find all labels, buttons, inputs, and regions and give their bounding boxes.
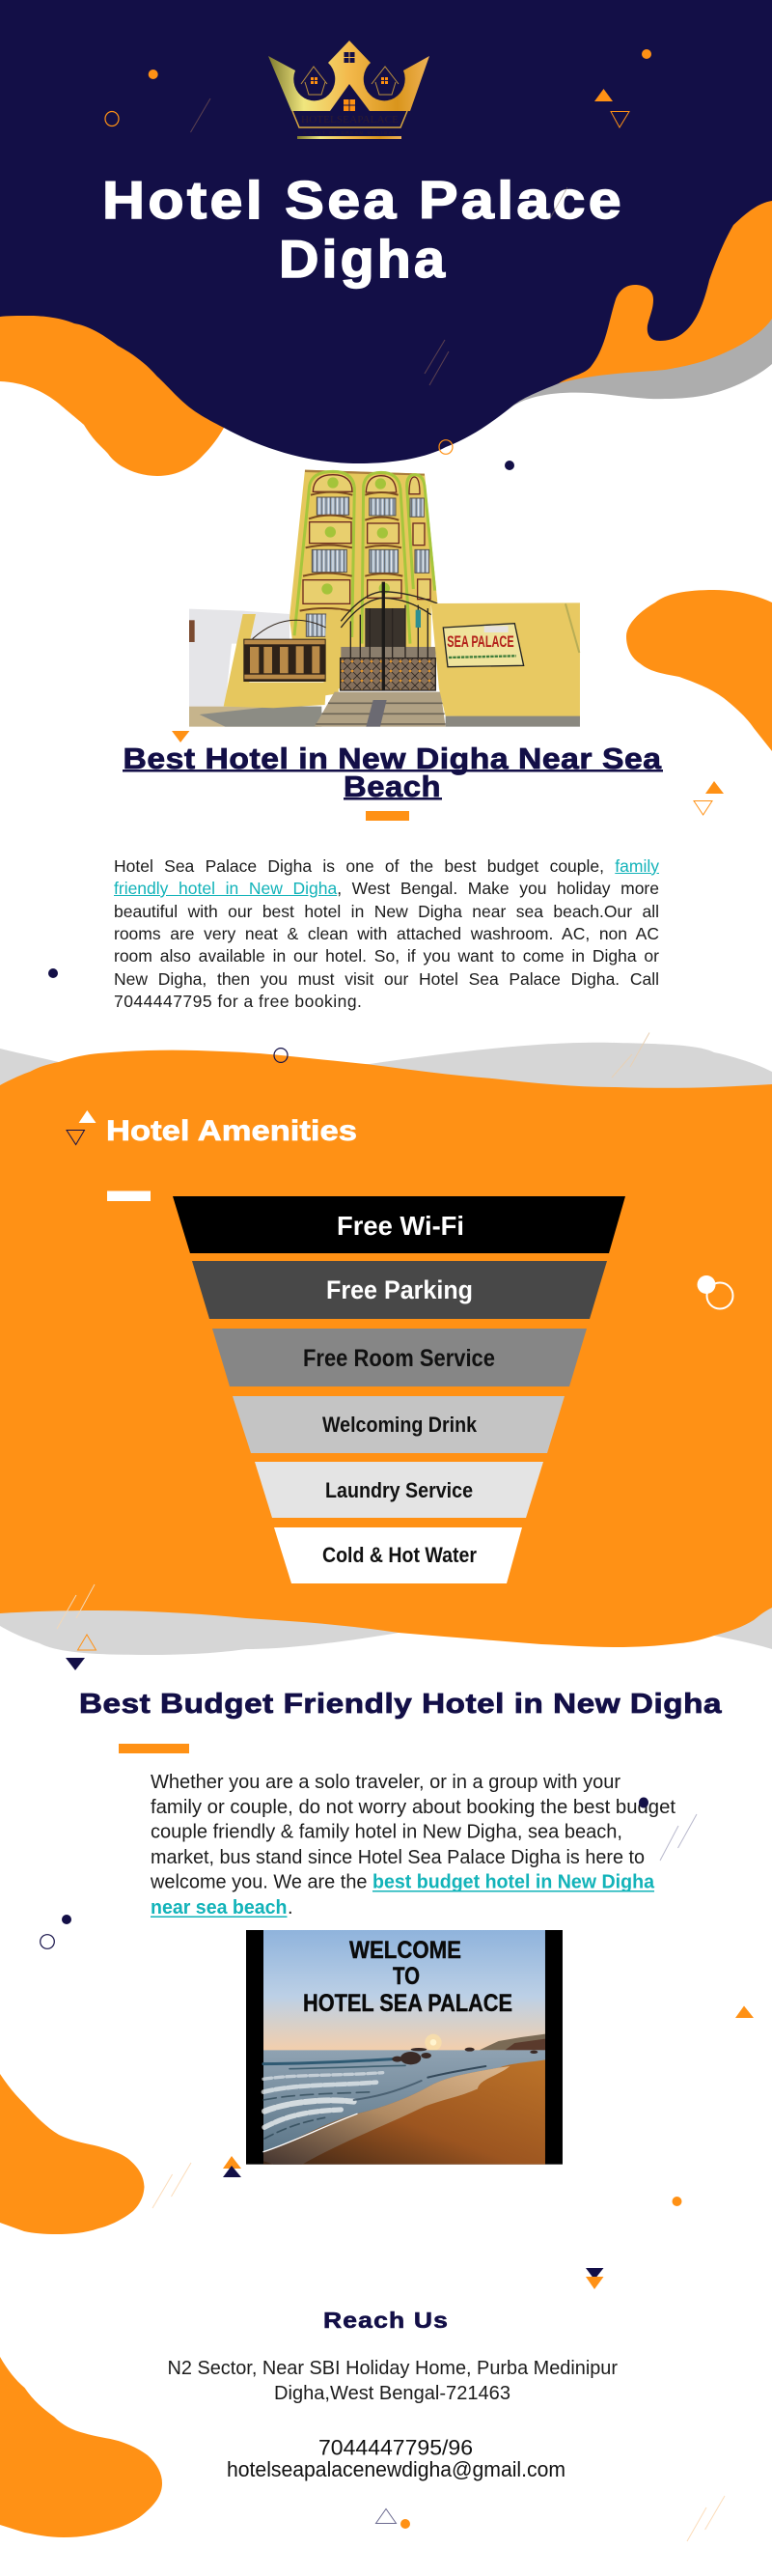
left fence (243, 639, 326, 682)
heading: reach us: Reach Us (323, 2308, 449, 2333)
entrance steps (315, 692, 446, 727)
contact: address (168, 2358, 618, 2404)
footer decorations (223, 2156, 681, 2529)
ground (189, 707, 317, 727)
photo: hotel building (189, 470, 580, 727)
heading: hotel amenities: Hotel Amenities (106, 1115, 357, 1147)
right orange blob (626, 590, 772, 751)
contact: phone and email: hotelseapalacenewdigha@gmail.com (227, 2457, 565, 2481)
centre window (344, 99, 355, 111)
right small house (372, 67, 399, 95)
headland (480, 2034, 545, 2050)
logo tagline: A UNIT OF DREAM HOLIDAY (303, 130, 396, 135)
rocks (392, 2048, 538, 2064)
building facade (290, 470, 437, 688)
text block: solo traveler paragraph: family or couple, do not worry about booking the best budget (151, 1797, 676, 1818)
crown name band (292, 111, 407, 127)
section divider triangles (66, 1635, 96, 1670)
text block: solo traveler paragraph (150, 1772, 676, 1918)
right boundary wall (431, 602, 580, 719)
left boundary wall (224, 614, 326, 708)
funnel level: free room service (212, 1329, 587, 1386)
budget section decorations (41, 1798, 754, 2018)
welcome text: WELCOME (349, 1937, 461, 1964)
green stars (321, 477, 390, 595)
text block: intro paragraph: friendly hotel in New Digha, West Bengal. Make you holiday more (114, 879, 659, 898)
heading: best budget friendly hotel: Best Budget Friendly Hotel in New Digha (79, 1689, 722, 1720)
text block: solo traveler paragraph: best budget hotel in New Digha (372, 1871, 655, 1892)
section heading: best hotel: Best Hotel in New Digha Near Sea (124, 742, 662, 775)
lower left orange blob (0, 2074, 145, 2234)
waves and foam (263, 2059, 485, 2152)
text block: solo traveler paragraph: welcome you. We are the (150, 1871, 367, 1892)
funnel level: laundry service (255, 1462, 543, 1518)
arches and panels (303, 475, 430, 603)
text block: solo traveler paragraph: market, bus stand since Hotel Sea Palace Digha is here to (151, 1847, 645, 1868)
amenities decorations (67, 1049, 733, 1309)
header background: grey wave (510, 309, 772, 408)
funnel level: welcoming drink: Welcoming Drink (322, 1413, 478, 1437)
top window (344, 52, 355, 63)
crown body (268, 41, 429, 111)
header background: right orange wave (550, 193, 772, 386)
title: Hotel Sea Palace (102, 170, 624, 230)
welcome text (303, 1937, 512, 2017)
funnel level: free room service: Free Room Service (303, 1345, 495, 1372)
sea (263, 2050, 545, 2152)
welcome text: TO (393, 1963, 420, 1990)
text block: solo traveler paragraph: . (288, 1897, 293, 1918)
beach scene (246, 1930, 563, 2165)
text block: intro paragraph: beautiful with our best hotel in New Digha near sea beach.Our all (114, 902, 659, 921)
text block: solo traveler paragraph: couple friendly & family hotel in New Digha, sea beach, (151, 1821, 622, 1842)
section heading: best hotel: Beach (344, 770, 441, 803)
text block: intro paragraph (114, 856, 659, 1011)
intro decorations (48, 731, 724, 978)
bottom left orange blob (0, 2357, 162, 2537)
green trim (294, 471, 435, 644)
header decorations (105, 49, 651, 470)
sand (263, 2058, 545, 2165)
text block: solo traveler paragraph: Whether you are a solo traveler, or in a group with your (151, 1772, 620, 1793)
title: Digha (279, 229, 448, 289)
header background: navy shape (0, 0, 772, 463)
sky (263, 1930, 545, 2051)
funnel level: welcoming drink (233, 1396, 565, 1453)
funnel chart: amenities (173, 1196, 625, 1583)
text block: intro paragraph: Hotel Sea Palace Digha is one of the best budget couple, family (114, 856, 659, 876)
entrance doorway and gate (365, 608, 405, 657)
sun (425, 2034, 442, 2051)
funnel level: cold and hot water (274, 1527, 522, 1583)
wall sign (443, 624, 524, 667)
balcony ledges (300, 492, 402, 611)
text block: intro paragraph: 7044447795 for a free booking. (114, 992, 362, 1011)
funnel level: laundry service: Laundry Service (325, 1478, 473, 1502)
funnel level: cold and hot water: Cold & Hot Water (322, 1543, 477, 1567)
contact: address: N2 Sector, Near SBI Holiday Home, Purba Medinipur (168, 2358, 618, 2379)
windows (306, 497, 429, 636)
orange accent bar (366, 811, 409, 821)
photo: welcome to hotel sea palace beach (246, 1930, 563, 2165)
left small house (301, 67, 327, 95)
text block: intro paragraph: room also available in our hotel. So, if you want to come in Digha or (114, 946, 659, 966)
orange accent bar (119, 1744, 189, 1753)
contact: phone and email: 7044447795/96 (318, 2435, 473, 2460)
funnel level: free parking (192, 1261, 607, 1319)
left neighbouring house (189, 609, 290, 707)
logo name: HOTELSEAPALACE (301, 115, 399, 126)
welcome text: HOTEL SEA PALACE (303, 1990, 512, 2017)
amenities background: grey waves (0, 1043, 772, 1655)
section heading: best hotel (123, 742, 663, 803)
header background: left orange wave (0, 309, 232, 476)
contact: address: Digha,West Bengal-721463 (274, 2383, 510, 2404)
text block: solo traveler paragraph: near sea beach (151, 1897, 288, 1918)
wall sign: SEA PALACE (447, 632, 514, 651)
funnel level: free wi-fi: Free Wi-Fi (337, 1211, 464, 1241)
wet sand reflection (263, 2066, 510, 2165)
logo: gold crown of houses (268, 41, 429, 139)
text block: intro paragraph: rooms are very neat & clean with attached washroom. AC, non AC (114, 923, 659, 942)
title (102, 170, 624, 289)
funnel level: free wi-fi (173, 1196, 625, 1253)
funnel level: free parking: Free Parking (326, 1275, 473, 1304)
logo underline bar (297, 136, 401, 139)
contact: phone and email (227, 2435, 565, 2481)
amenities background: orange panel (0, 1050, 772, 1647)
text block: intro paragraph: New Digha, then you must visit our Hotel Sea Palace Digha. Call (114, 969, 659, 989)
